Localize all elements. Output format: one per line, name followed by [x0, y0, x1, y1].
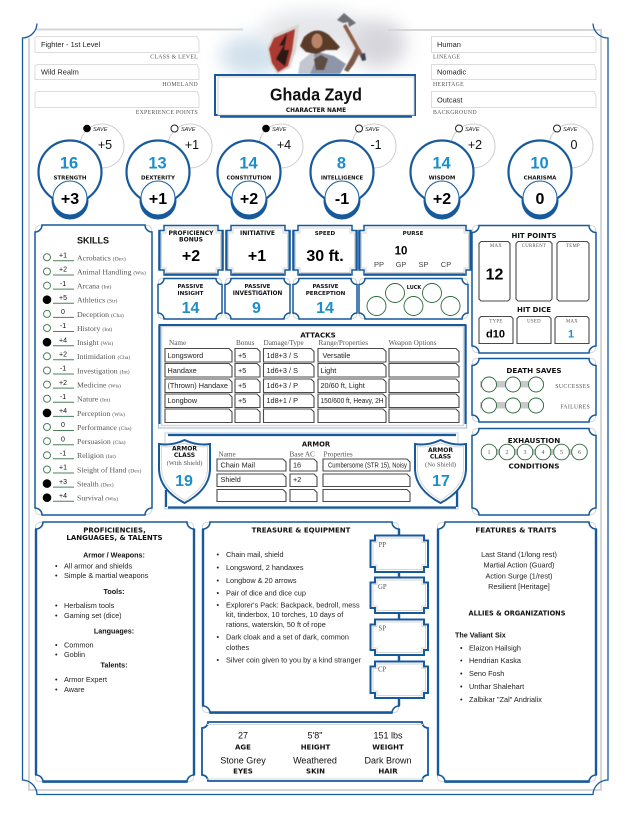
ability: dexterity: 13 — [148, 154, 167, 172]
panel: speed — [293, 226, 357, 275]
panel: attacks: Weapon Options — [388, 339, 437, 347]
shield: armor class with shield: 19 — [175, 473, 193, 490]
ability: strength: STRENGTH — [53, 176, 87, 182]
ability: charisma: 10 — [530, 154, 549, 172]
panel: hit points: 12 — [486, 266, 504, 284]
panel: treasure and equipment: Longsword, 2 handaxes — [226, 563, 304, 572]
ability: dexterity: +1 — [185, 138, 199, 152]
panel: purse: CP — [441, 260, 451, 269]
background field: BACKGROUND — [433, 110, 477, 116]
panel: attacks: 20/60 ft, Light — [320, 381, 365, 390]
panel: features and traits: • — [460, 656, 463, 665]
panel: exhaustion and conditions: CONDITIONS — [509, 462, 559, 470]
shield: armor class no shield: ARMOR — [428, 447, 453, 454]
panel: exhaustion and conditions: EXHAUSTION — [508, 436, 560, 445]
panel: treasure and equipment: kit, tinderbox, 10 torches, 10 days of — [226, 610, 344, 619]
panel: physical traits: EYES — [233, 768, 253, 776]
panel: proficiencies, languages and talents: LANGUAGES, & TALENTS — [66, 534, 163, 542]
panel: passive insight: 14 — [182, 300, 200, 317]
coin box: GP — [370, 578, 428, 613]
panel: proficiencies, languages and talents: • — [55, 562, 58, 570]
panel: death saves: FAILURES — [560, 404, 590, 410]
panel: passive perception: 14 — [316, 300, 334, 317]
panel: proficiencies, languages and talents: Simple & martial weapons — [64, 571, 149, 580]
panel: hit points — [472, 226, 596, 353]
experience points field: EXPERIENCE POINTS — [136, 110, 198, 116]
panel: purse: PURSE — [403, 231, 424, 237]
ability: intelligence: SAVE — [365, 127, 380, 133]
panel: luck — [359, 278, 468, 319]
panel: death saves: SUCCESSES — [555, 384, 590, 390]
panel: treasure and equipment: • — [216, 563, 220, 572]
panel: armor — [165, 433, 458, 509]
panel: hit points: HIT DICE — [517, 306, 551, 314]
panel: features and traits: Unthar Shalehart — [469, 682, 524, 691]
panel: exhaustion and conditions — [472, 428, 596, 515]
panel: attacks: +5 — [238, 396, 246, 405]
panel: skills: +4 — [59, 408, 67, 415]
panel: proficiencies, languages and talents: Aware — [64, 685, 85, 694]
panel: skills: Stealth (Dex) — [77, 480, 114, 488]
homeland field: HOMELAND — [162, 82, 198, 88]
ability: constitution — [218, 124, 303, 220]
panel: hit points: 1 — [568, 328, 574, 340]
coin box: GP: GP — [378, 584, 387, 591]
panel: hit points: MAX — [490, 244, 502, 249]
ability: charisma: 0 — [536, 191, 545, 208]
panel: skills: Investigation (Int) — [77, 366, 130, 375]
ability: dexterity — [126, 124, 212, 220]
panel: features and traits — [438, 522, 596, 782]
panel: skills: SKILLS — [77, 236, 109, 246]
panel: treasure and equipment: • — [216, 550, 220, 559]
panel: armor: 16 — [293, 460, 301, 470]
panel: features and traits: Seno Fosh — [469, 669, 504, 678]
homeland field: Wild Realm — [41, 68, 79, 76]
character name box — [215, 75, 415, 116]
panel: death saves: DEATH SAVES — [506, 366, 562, 375]
ability: intelligence: 8 — [337, 154, 346, 172]
panel: skills: Medicine (Wis) — [77, 380, 121, 390]
panel: skills: Performance (Cha) — [77, 423, 132, 432]
panel: hit points: d10 — [486, 328, 505, 340]
panel: hit points: USED — [527, 320, 541, 324]
ability: intelligence: -1 — [335, 191, 349, 208]
ability: strength: SAVE — [93, 127, 108, 133]
panel: skills: Acrobatics (Dex) — [77, 253, 126, 262]
panel: treasure and equipment: Chain mail, shield — [226, 550, 284, 559]
character name box: CHARACTER NAME — [286, 108, 346, 114]
panel: skills: Deception (Cha) — [77, 310, 124, 319]
panel: attacks: Versatile — [322, 351, 350, 360]
panel: initiative — [226, 226, 290, 275]
panel: proficiencies, languages and talents: Gaming set (dice) — [64, 611, 122, 620]
panel: purse: 10 — [395, 246, 407, 258]
panel: passive insight — [158, 278, 222, 319]
ability: charisma — [508, 124, 593, 220]
panel: purse: PP — [374, 260, 384, 269]
panel: features and traits: ALLIES & ORGANIZATIONS — [469, 610, 566, 618]
ability: dexterity: +1 — [149, 191, 167, 208]
panel: armor: ARMOR — [302, 440, 331, 448]
panel: features and traits: Zalbikar "Zal" Andrialix — [469, 695, 542, 704]
panel: attacks: 1d8+3 / S — [266, 351, 298, 360]
panel: features and traits: • — [460, 669, 463, 678]
panel: proficiencies, languages and talents: Languages: — [94, 626, 134, 636]
panel: armor: Chain Mail — [220, 460, 255, 470]
panel: proficiencies, languages and talents: All armor and shields — [64, 562, 132, 570]
panel: speed: SPEED — [315, 231, 336, 237]
panel: exhaustion and conditions: 3 — [524, 450, 526, 456]
panel: attacks: ATTACKS — [300, 330, 336, 340]
ability: strength — [38, 124, 124, 220]
panel: proficiencies, languages and talents: Talents: — [100, 660, 128, 670]
panel: initiative: INITIATIVE — [240, 230, 275, 237]
heritage field: Nomadic — [437, 68, 466, 76]
panel: treasure and equipment: • — [216, 632, 220, 642]
panel: attacks: Name — [169, 339, 186, 347]
panel: armor: Base AC — [290, 450, 315, 458]
panel: proficiency bonus — [159, 226, 223, 275]
panel: skills: +1 — [59, 252, 67, 260]
panel: hit points: HIT POINTS — [511, 232, 557, 240]
panel: armor: Name — [218, 450, 236, 458]
panel: skills: 0 — [61, 309, 65, 316]
panel: passive investigation: 9 — [252, 300, 261, 317]
shield: armor class no shield — [415, 440, 466, 503]
panel: hit points: MAX — [566, 320, 578, 324]
shield: armor class no shield: (No Shield) — [425, 462, 456, 468]
panel: physical traits: WEIGHT — [372, 744, 404, 752]
ability: constitution: +4 — [277, 138, 291, 152]
panel: proficiencies, languages and talents: Herbalism tools — [64, 601, 115, 610]
panel: skills: Intimidation (Cha) — [77, 352, 130, 361]
panel: physical traits: 27 — [238, 730, 248, 740]
panel: proficiencies, languages and talents: Common — [64, 640, 94, 650]
shield: armor class with shield: CLASS — [174, 452, 195, 459]
panel: exhaustion and conditions: 2 — [506, 450, 508, 456]
panel: features and traits: • — [460, 682, 463, 691]
panel: skills: +2 — [59, 352, 67, 358]
coin box: SP — [370, 620, 428, 655]
panel: skills — [35, 225, 152, 515]
panel: skills: -1 — [60, 366, 66, 373]
panel: armor: Shield — [220, 475, 241, 484]
panel: passive investigation: INVESTIGATION — [233, 291, 282, 297]
ability: wisdom: +2 — [433, 191, 451, 208]
homeland field — [35, 64, 199, 88]
panel: skills: 0 — [61, 436, 65, 443]
ability: wisdom: WISDOM — [429, 176, 455, 182]
panel: initiative: +1 — [248, 248, 266, 265]
panel: speed: 30 ft. — [306, 248, 344, 265]
panel: treasure and equipment: Longbow & 20 arrows — [226, 576, 297, 585]
class and level field: CLASS & LEVEL — [150, 54, 198, 60]
panel: purse: GP — [396, 260, 406, 269]
shield: armor class with shield: (With Shield) — [167, 460, 202, 467]
panel: skills: Religion (Int) — [77, 451, 116, 460]
panel: skills: 0 — [61, 422, 65, 429]
panel: physical traits: Dark Brown — [364, 756, 412, 766]
shield: armor class no shield: 17 — [432, 473, 450, 490]
panel: physical traits: Stone Grey — [220, 756, 266, 766]
panel: physical traits: HEIGHT — [301, 744, 331, 752]
panel: attacks: Range/Properties — [318, 339, 368, 347]
panel: attacks: Damage/Type — [264, 339, 304, 347]
heritage field: HERITAGE — [433, 82, 464, 88]
panel: treasure and equipment — [202, 522, 399, 713]
ability: wisdom: 14 — [432, 154, 451, 172]
ability: intelligence: -1 — [370, 138, 382, 152]
ability: strength: 16 — [60, 154, 78, 172]
panel: features and traits: Martial Action (Guard) — [484, 560, 554, 570]
panel: attacks: Bonus — [236, 339, 255, 347]
heritage field — [432, 64, 596, 88]
panel: passive perception: PASSIVE — [313, 284, 339, 290]
background field — [432, 92, 596, 116]
panel: skills: Survival (Wis) — [77, 494, 118, 503]
panel: treasure and equipment: • — [216, 600, 220, 610]
panel: skills: +2 — [59, 380, 67, 387]
panel: death saves — [472, 358, 596, 422]
ability: charisma: CHARISMA — [524, 176, 557, 182]
ability: constitution: CONSTITUTION — [227, 176, 271, 182]
panel: features and traits: • — [460, 644, 463, 652]
ability: strength: +3 — [61, 191, 79, 208]
panel: skills: Insight (Wis) — [77, 338, 113, 347]
panel: attacks: +5 — [238, 366, 246, 375]
panel: treasure and equipment: clothes — [226, 643, 249, 652]
coin box: PP — [370, 536, 428, 572]
panel: treasure and equipment: rations, waterskin, 50 ft of rope — [226, 620, 326, 629]
panel: features and traits: Hendrian Kaska — [469, 656, 522, 665]
panel: proficiencies, languages and talents: PROFICIENCIES, — [83, 526, 146, 534]
panel: features and traits: Resilient [Heritage] — [488, 582, 550, 591]
panel: skills: +4 — [59, 493, 67, 500]
panel: physical traits — [202, 722, 428, 781]
panel: hit points: CURRENT — [522, 244, 546, 249]
shield: armor class no shield: CLASS — [430, 454, 451, 460]
panel: attacks: Light — [320, 366, 336, 375]
panel: skills: +1 — [59, 465, 67, 472]
ability: intelligence: INTELLIGENCE — [321, 176, 364, 182]
panel: features and traits: Elaizon Hailsigh — [469, 644, 521, 652]
panel: proficiencies, languages and talents: • — [55, 611, 58, 620]
panel: luck: LUCK — [407, 285, 422, 291]
panel: skills: -1 — [60, 281, 66, 288]
panel: features and traits: • — [460, 695, 463, 704]
coin box: CP: CP — [378, 666, 387, 674]
panel: physical traits: HAIR — [378, 768, 398, 776]
panel: attacks: 1d6+3 / P — [266, 381, 298, 390]
panel: skills: -1 — [60, 323, 66, 330]
panel: passive investigation — [225, 278, 290, 319]
coin box: SP: SP — [378, 626, 386, 632]
ability: dexterity: DEXTERITY — [141, 176, 176, 182]
panel: passive perception: PERCEPTION — [306, 291, 346, 297]
panel: physical traits: 5'8" — [308, 730, 322, 740]
panel: purse: SP — [418, 260, 429, 269]
panel: proficiencies, languages and talents: Tools: — [103, 587, 125, 596]
panel: skills: Sleight of Hand (Dex) — [77, 465, 142, 474]
shield: armor class with shield: ARMOR — [172, 446, 197, 452]
panel: proficiencies, languages and talents: Goblin — [64, 650, 85, 659]
panel: armor: Cumbersome (STR 15), Noisy — [328, 460, 407, 470]
panel: treasure and equipment: • — [216, 576, 220, 585]
ability: wisdom — [410, 124, 495, 220]
panel: hit points: TYPE — [489, 320, 503, 324]
panel: exhaustion and conditions: 6 — [578, 450, 581, 456]
panel: exhaustion and conditions: 1 — [488, 450, 490, 456]
panel: features and traits: Action Surge (1/rest) — [486, 572, 552, 580]
panel: treasure and equipment: Pair of dice and dice cup — [226, 588, 306, 598]
ability: charisma: SAVE — [563, 127, 578, 133]
panel: features and traits: FEATURES & TRAITS — [475, 526, 557, 534]
panel: attacks: Longbow — [168, 396, 198, 405]
ability: wisdom: SAVE — [465, 127, 480, 133]
panel: skills: History (Int) — [77, 324, 112, 333]
panel: attacks: 1d6+3 / S — [266, 366, 298, 375]
ability: constitution: +2 — [240, 191, 258, 208]
panel: treasure and equipment: TREASURE & EQUIPMENT — [252, 526, 351, 534]
ability: wisdom: +2 — [468, 138, 482, 152]
panel: proficiencies, languages and talents — [36, 522, 194, 782]
panel: proficiency bonus: PROFICIENCY — [169, 230, 214, 237]
panel: proficiencies, languages and talents: • — [55, 675, 58, 684]
class and level field: Fighter - 1st Level — [41, 40, 101, 49]
panel: proficiencies, languages and talents: • — [55, 571, 58, 580]
panel: physical traits: SKIN — [306, 768, 325, 776]
ability: charisma: 0 — [571, 138, 578, 152]
class and level field — [35, 36, 199, 60]
panel: proficiency bonus: BONUS — [179, 236, 203, 244]
panel: armor: +2 — [293, 475, 301, 484]
panel: skills: -1 — [60, 450, 66, 458]
panel: attacks: 1d8+1 / P — [266, 396, 298, 405]
panel: proficiencies, languages and talents: • — [55, 685, 58, 694]
panel: hit points: TEMP — [566, 244, 580, 249]
panel: exhaustion and conditions: 4 — [542, 450, 544, 456]
panel: armor: Properties — [324, 450, 353, 458]
panel: features and traits: Last Stand (1/long rest) — [481, 550, 557, 559]
panel: passive insight: INSIGHT — [178, 291, 204, 297]
panel: attacks: Longsword — [168, 351, 203, 360]
lineage field: Human — [437, 40, 461, 49]
panel: purse — [359, 226, 471, 275]
panel: treasure and equipment: Silver coin given to you by a kind stranger — [226, 656, 362, 664]
panel: skills: Nature (Int) — [77, 395, 110, 404]
lineage field: LINEAGE — [433, 54, 460, 60]
panel: treasure and equipment: • — [216, 656, 220, 664]
panel: skills: +2 — [59, 267, 67, 274]
panel: attacks: 150/600 ft, Heavy, 2H — [320, 396, 384, 405]
panel: proficiencies, languages and talents: • — [55, 640, 58, 650]
panel: passive insight: PASSIVE — [178, 284, 204, 290]
ability: constitution: 14 — [239, 154, 258, 172]
panel: skills: -1 — [60, 394, 66, 401]
panel: skills: Athletics (Str) — [77, 296, 118, 305]
panel: features and traits: The Valiant Six — [455, 630, 506, 640]
panel: attacks — [158, 324, 466, 428]
ability: constitution: SAVE — [272, 127, 287, 133]
ability: intelligence — [310, 124, 396, 220]
panel: treasure and equipment: Explorer's Pack: Backpack, bedroll, mess — [226, 600, 360, 610]
lineage field — [432, 36, 596, 60]
shield: armor class with shield — [159, 440, 210, 503]
panel: proficiency bonus: +2 — [182, 248, 200, 265]
experience points field — [35, 92, 199, 116]
panel: attacks: +5 — [238, 351, 246, 360]
panel: physical traits: Weathered — [293, 756, 337, 766]
panel: skills: Perception (Wis) — [77, 409, 125, 418]
coin box: CP — [370, 662, 428, 698]
panel: skills: +3 — [59, 479, 67, 486]
panel: passive investigation: PASSIVE — [245, 284, 271, 290]
panel: proficiencies, languages and talents: Armor Expert — [64, 675, 107, 684]
panel: treasure and equipment: • — [216, 588, 220, 598]
panel: skills: Arcana (Int) — [77, 282, 112, 290]
character portrait — [220, 10, 406, 76]
panel: proficiencies, languages and talents: Armor / Weapons: — [83, 550, 145, 560]
ability: strength: +5 — [98, 138, 112, 152]
panel: attacks: Handaxe — [168, 366, 197, 375]
panel: attacks: +5 — [238, 381, 246, 390]
background field: Outcast — [437, 96, 462, 104]
ability: dexterity: SAVE — [181, 127, 196, 133]
panel: physical traits: AGE — [235, 744, 251, 752]
panel: physical traits: 151 lbs — [373, 730, 403, 740]
panel: passive perception — [293, 278, 357, 319]
panel: skills: +4 — [59, 337, 67, 344]
panel: proficiencies, languages and talents: • — [55, 650, 58, 659]
panel: skills: +5 — [59, 295, 67, 302]
coin box: PP: PP — [378, 542, 386, 549]
panel: treasure and equipment: Dark cloak and a set of dark, common — [226, 632, 349, 642]
panel: exhaustion and conditions: 5 — [560, 450, 563, 456]
panel: proficiencies, languages and talents: • — [55, 601, 58, 610]
character name box: Ghada Zayd — [270, 84, 362, 104]
panel: skills: Animal Handling (Wis) — [77, 267, 146, 276]
panel: attacks: (Thrown) Handaxe — [168, 381, 228, 390]
panel: skills: Persuasion (Cha) — [77, 437, 126, 446]
